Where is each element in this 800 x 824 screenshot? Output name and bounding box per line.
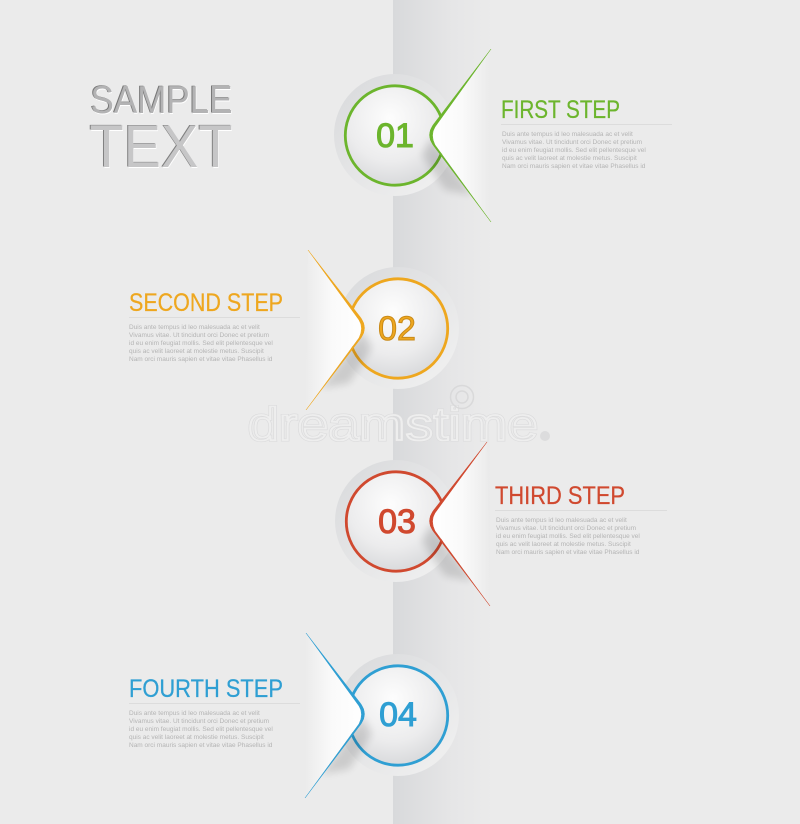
body text: id eu enim feugiat mollis. Sed elit pellentesque vel	[502, 147, 646, 154]
title: sample text: SAMPLE	[91, 80, 233, 123]
icon: numbered circle 03: 03	[378, 503, 416, 541]
vertical strip	[393, 0, 493, 824]
title: sample text: TEXT	[90, 113, 232, 180]
icon: numbered circle 04	[337, 654, 459, 776]
body text: Nam orci mauris sapien et vitae vitae Phasellus id	[496, 549, 640, 556]
body text: quis ac velit laoreet at molestie metus. Suscipit	[129, 734, 264, 741]
arrow pointer	[306, 250, 372, 410]
body text: Vivamus vitae. Ut tincidunt orci Donec et pretium	[496, 525, 636, 532]
icon: numbered circle 01: 01	[376, 117, 414, 155]
divider	[129, 703, 300, 704]
step 1	[334, 49, 672, 222]
body text: Vivamus vitae. Ut tincidunt orci Donec et pretium	[502, 139, 642, 146]
step 2	[129, 250, 459, 410]
watermark	[248, 386, 550, 450]
title: sample text: TEXT	[90, 114, 233, 181]
body text: Duis ante tempus id leo malesuada ac et velit	[129, 710, 260, 717]
body text: Nam orci mauris sapien et vitae vitae Phasellus id	[129, 742, 273, 749]
divider	[501, 124, 672, 125]
body text: quis ac velit laoreet at molestie metus. Suscipit	[496, 541, 631, 548]
arrow pointer	[422, 442, 490, 606]
icon: numbered circle 04: 04	[379, 696, 417, 734]
body text: Vivamus vitae. Ut tincidunt orci Donec et pretium	[129, 332, 269, 339]
body text: id eu enim feugiat mollis. Sed elit pellentesque vel	[129, 340, 273, 347]
body text: Duis ante tempus id leo malesuada ac et velit	[502, 131, 633, 138]
heading: THIRD STEP	[495, 482, 625, 510]
body text: Vivamus vitae. Ut tincidunt orci Donec et pretium	[129, 718, 269, 725]
body text: id eu enim feugiat mollis. Sed elit pellentesque vel	[129, 726, 273, 733]
divider	[495, 510, 667, 511]
body text: quis ac velit laoreet at molestie metus. Suscipit	[129, 348, 264, 355]
step 3	[335, 442, 667, 606]
divider	[129, 317, 300, 318]
body text: id eu enim feugiat mollis. Sed elit pellentesque vel	[496, 533, 640, 540]
icon: numbered circle 02	[337, 267, 459, 389]
icon: numbered circle 03	[335, 460, 457, 582]
title: sample text: SAMPLE	[90, 79, 232, 122]
step 4	[129, 633, 459, 798]
body text: quis ac velit laoreet at molestie metus. Suscipit	[502, 155, 637, 162]
body text: Duis ante tempus id leo malesuada ac et velit	[129, 324, 260, 331]
body text: Nam orci mauris sapien et vitae vitae Phasellus id	[129, 356, 273, 363]
title: sample text	[88, 78, 233, 181]
title: sample text: SAMPLE	[90, 78, 232, 122]
watermark: dreamstime	[248, 398, 538, 450]
body text: Nam orci mauris sapien et vitae vitae Phasellus id	[502, 163, 646, 170]
heading: SECOND STEP	[129, 289, 283, 317]
watermark: dreamstime	[248, 398, 538, 450]
body text: Duis ante tempus id leo malesuada ac et velit	[496, 517, 627, 524]
arrow pointer	[305, 633, 372, 798]
heading: FIRST STEP	[501, 96, 620, 124]
icon: numbered circle 02: 02	[378, 310, 416, 348]
icon: numbered circle 01	[334, 74, 456, 196]
arrow pointer	[422, 49, 491, 222]
title: sample text: TEXT	[88, 112, 232, 180]
heading: FOURTH STEP	[129, 675, 283, 703]
